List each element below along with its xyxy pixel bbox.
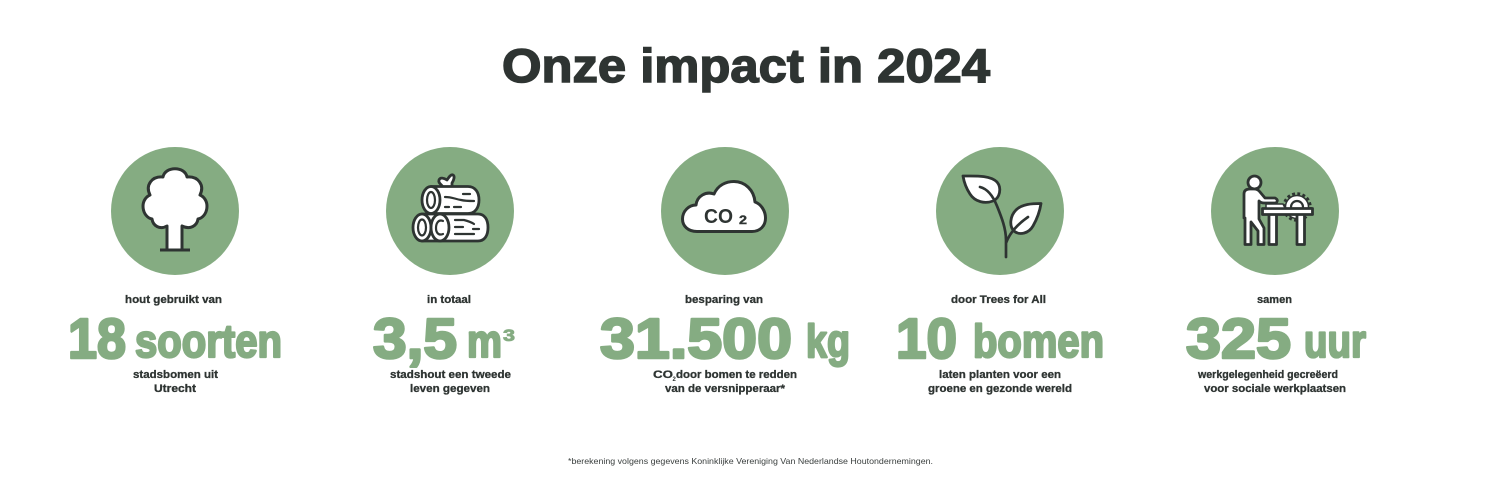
description: leven gegeven <box>410 383 490 395</box>
icon: plant <box>936 147 1064 275</box>
big number: 325 <box>1186 307 1291 371</box>
big number: 18 <box>68 307 126 371</box>
intro text: in totaal <box>427 294 471 306</box>
icon: tree <box>111 147 239 275</box>
big number: 31.500 <box>600 307 792 371</box>
icon: logs <box>386 147 514 275</box>
description: stadshout een tweede <box>390 369 511 381</box>
description: Utrecht <box>154 383 196 395</box>
icon: CO2 cloud <box>661 147 789 275</box>
intro text: besparing van <box>685 294 763 306</box>
intro text: door Trees for All <box>951 294 1046 306</box>
description: van de versnipperaar* <box>665 383 786 395</box>
icon: carpenter at saw table <box>1211 147 1339 275</box>
big number: 3,5 <box>373 307 457 371</box>
panel: 10 bomen <box>896 147 1104 395</box>
panel: 325 uur <box>1186 147 1366 395</box>
unit: m <box>467 315 502 367</box>
description: laten planten voor een <box>939 369 1061 381</box>
description: werkgelegenheid gecreëerd <box>1197 369 1338 381</box>
description: voor sociale werkplaatsen <box>1204 383 1346 395</box>
title: Onze impact in 2024 <box>502 40 991 93</box>
unit: uur <box>1304 315 1366 367</box>
description: groene en gezonde wereld <box>928 383 1072 395</box>
footnote: *berekening volgens gegevens Koninklijke Vereniging Van Nederlandse Houtondernemingen. <box>568 456 933 466</box>
description: 2 <box>672 377 676 383</box>
panel: 3,5 m3 <box>373 147 515 395</box>
description <box>1197 369 1346 395</box>
description: door bomen te redden <box>676 369 797 381</box>
description <box>653 369 797 395</box>
icon: CO2 cloud: 2 <box>739 213 747 227</box>
big number: 10 <box>896 307 957 371</box>
description: stadsbomen uit <box>133 369 218 381</box>
unit exponent: 3 <box>503 326 515 345</box>
description: CO <box>653 369 674 381</box>
unit: kg <box>806 315 850 367</box>
intro text: hout gebruikt van <box>125 294 222 306</box>
description <box>390 369 511 395</box>
description <box>133 369 218 395</box>
unit: soorten <box>135 315 282 367</box>
icon: CO2 cloud: CO <box>704 206 733 228</box>
panel: 31.500 kg <box>600 147 850 395</box>
panel: 18 soorten <box>68 147 282 395</box>
description <box>928 369 1072 395</box>
unit: bomen <box>973 315 1104 367</box>
intro text: samen <box>1257 294 1292 306</box>
